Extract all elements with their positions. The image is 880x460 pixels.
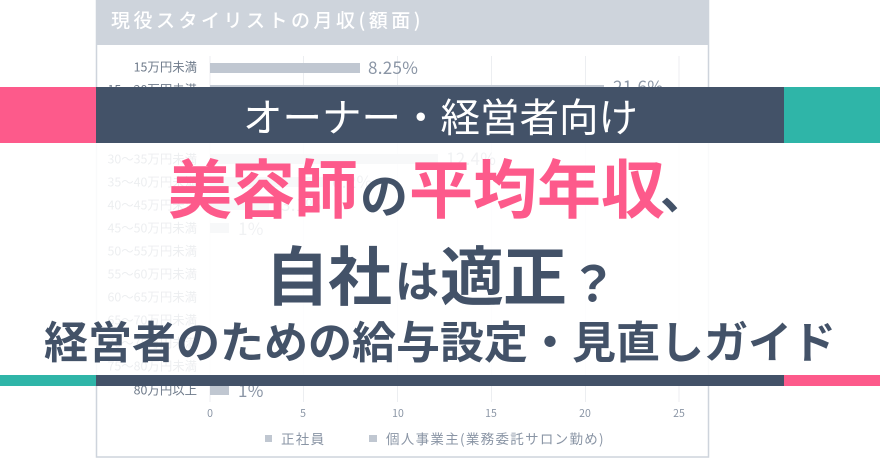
x axis: 10 [392,406,404,421]
bar chart rows: 80万円以上 [134,380,197,398]
bar chart rows: 60〜65万円未満 [108,288,197,306]
bar chart rows: 1% [238,215,264,240]
bottom band [0,375,880,386]
bar chart rows: 3.1% [281,191,321,216]
bar chart rows: 30〜35万円未満 [108,150,197,168]
legend: 正社員 [281,428,325,448]
x axis: 25 [673,406,685,421]
bar chart rows: 1% [238,377,264,402]
main title line 1: 平均年収 [409,140,665,232]
bar chart rows: 21.6% [613,73,663,98]
main title line 1: の [360,157,408,227]
top band [0,87,880,144]
bar chart rows: 70〜75万円未満 [108,334,197,352]
main title line 1: 、 [660,153,708,223]
bar chart rows: 15〜20万円未満 [108,80,197,98]
x axis: 5 [300,406,306,421]
bar chart rows: 55〜60万円未満 [108,264,197,282]
pink segment [0,87,96,143]
x axis [207,406,685,421]
main title line 2: 自 [265,227,329,319]
bar chart rows: 35〜40万円未満 [108,172,197,190]
bar chart rows: 75〜80万円未満 [108,356,197,374]
bar chart rows: 8.25% [368,54,418,79]
main title line 1: 美容師 [168,140,357,232]
main title line 2: 適 [440,227,504,319]
main title line 2: は [395,246,439,310]
main title line 2 [265,227,617,319]
pink segment [784,375,880,386]
dark segment [96,375,784,386]
legend [265,428,605,448]
teal segment [784,87,880,143]
chart heading: 現役スタイリストの月収(額面) [111,6,424,33]
bar chart rows: 15万円未満 [134,58,197,76]
subtitle: 経営者のための給与設定・見直しガイド [44,307,836,371]
main title line 1 [168,140,708,232]
bar chart rows: 40〜45万円未満 [108,196,197,214]
band label: オーナー・経営者向け [243,87,638,144]
main title line 2: 社 [328,227,392,319]
legend: 個人事業主(業務委託サロン勤め) [386,428,605,448]
x axis: 15 [485,406,497,421]
main title line 2: 正 [503,227,567,319]
bar chart rows: 65〜70万円未満 [108,310,197,328]
bar chart rows: 45〜50万円未満 [108,218,197,236]
bar chart rows [108,54,663,402]
bar chart rows: 12.4% [446,145,496,170]
teal segment [0,375,96,386]
bar chart rows: 50〜55万円未満 [108,242,197,260]
dark segment [96,87,784,143]
bar chart rows: 6.2% [332,168,372,193]
x axis: 0 [207,406,213,421]
main title line 2: ？ [569,245,617,315]
x axis: 20 [579,406,591,421]
chart heading [96,0,709,45]
